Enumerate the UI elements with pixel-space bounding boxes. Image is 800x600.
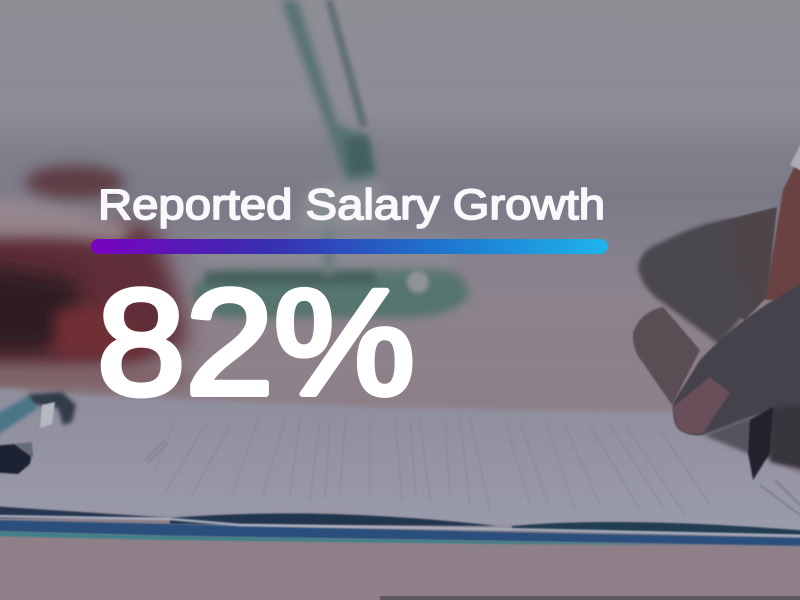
document paper: [0, 386, 800, 532]
left hand: blurred red hand: [0, 165, 190, 390]
gradient divider bar: [91, 239, 608, 254]
dark strip at bottom edge: [380, 596, 800, 600]
printed text lines on paper: [145, 420, 800, 515]
pen on left: [0, 392, 76, 474]
lamp: blurred green desk lamp: [192, 0, 468, 318]
heading: Reported Salary Growth: [98, 181, 605, 229]
folder edge: [0, 506, 800, 546]
right hand holding pen: [633, 125, 800, 480]
pen barrel: [765, 125, 800, 300]
statistic: 82%: 82%: [97, 258, 415, 426]
pen nib: [748, 407, 773, 480]
